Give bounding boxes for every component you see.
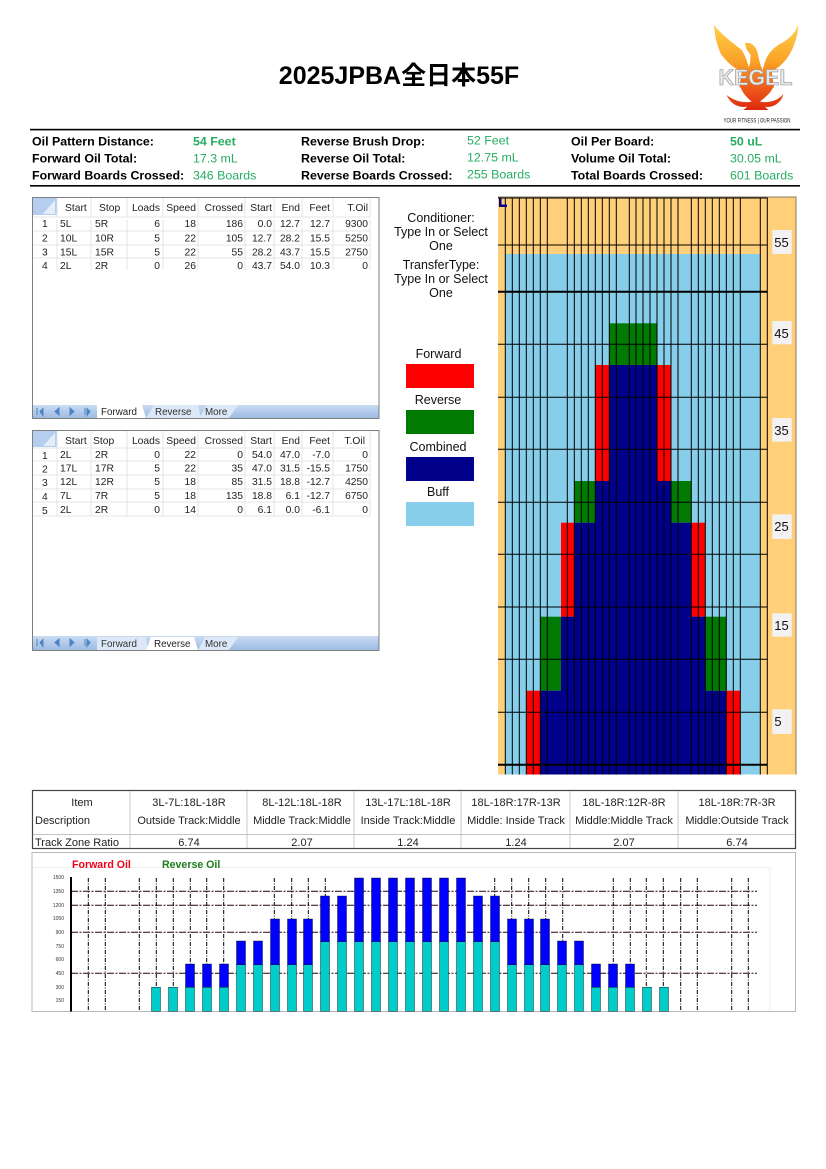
reverse oil summary: Reverse Boards Crossed: [301,168,453,182]
column: middle track left: 8L-12L:18L-18R [262,797,342,809]
table column headers: Crossed [205,203,243,214]
table rows: 7R [95,491,108,502]
reverse oil summary: 255 Boards [467,168,530,182]
table rows: 9300 [345,219,368,230]
reverse oil summary: 52 Feet [467,134,510,148]
column: outside track left: 3L-7L:18L-18R [152,797,226,809]
table rows: 0 [154,450,160,461]
table rows: 0 [237,450,243,461]
y axis labels: 300 [56,985,64,991]
column: inside track right: 18L-18R:17R-13R [471,797,561,809]
legend: pattern colours: Combined [410,440,467,454]
table rows: 6.1 [258,505,272,516]
table column headers: Stop [93,436,114,447]
oil pattern graph [498,197,796,774]
total oil summary: Oil Per Board: [571,134,654,148]
summary header block [30,129,800,187]
table rows: 31.5 [280,464,300,474]
panel: forward load table [32,198,379,418]
column: inside track left: Inside Track:Middle [361,815,455,827]
table rows: 6750 [345,491,368,502]
table rows: 43.7 [252,261,272,272]
table rows: 0 [362,505,368,516]
table rows: 15R [95,248,114,258]
table rows: 12L [60,477,77,488]
title: 2025JPBA全日本55F [279,62,519,90]
table rows: 17R [95,464,114,474]
total oil summary: Total Boards Crossed: [571,168,703,182]
panel: reverse load table [32,430,379,650]
oil volume bar chart [32,852,796,1012]
distance labels: 45 [774,326,789,341]
forward oil bars [152,942,668,1011]
column: inside track left: 13L-17L:18L-18R [365,797,451,809]
table rows: 18.8 [280,477,300,488]
table rows: 1 [42,451,48,462]
table rows: 105 [226,234,243,244]
table rows: 1750 [345,464,368,474]
total oil summary: Volume Oil Total: [571,152,671,166]
logo: Kegel phoenix [714,24,798,125]
table rows: 12R [95,477,114,488]
table rows: 2L [60,450,72,461]
legend: pattern colours: Reverse [415,393,461,407]
table column headers: End [282,436,300,447]
forward oil summary: Forward Oil Total: [32,152,137,166]
row headings [35,797,119,849]
sheet tabs: More [205,639,228,650]
table rows [42,219,368,272]
y axis labels: 600 [56,957,64,963]
column: middle track left: Middle Track:Middle [253,815,351,827]
table rows: 5 [154,234,160,244]
column: middle track right: 18L-18R:12R-8R [582,797,666,809]
table column headers: Loads [132,436,160,447]
oil zones: reverse [540,323,726,691]
total oil summary [571,134,793,182]
table rows: 22 [185,450,196,461]
table column headers: Feet [309,436,330,447]
y axis [70,877,72,1012]
oil zones: combined [540,365,726,774]
column: outside track right: 6.74 [726,837,748,849]
y axis labels: 900 [56,930,64,936]
forward oil summary [32,134,256,182]
column: outside track left: 6.74 [178,837,200,849]
forward oil summary: 346 Boards [193,168,256,182]
distance labels: 55 [774,235,789,250]
table rows: 43.7 [280,248,300,258]
forward oil summary: Forward Boards Crossed: [32,168,184,182]
table rows: 4 [42,261,48,272]
table rows: 22 [185,464,196,474]
column: inside track right [467,797,565,849]
table rows: 5R [95,219,108,230]
table rows: 3 [42,248,48,258]
table rows: 17L [60,464,77,474]
legend: pattern colours: Buff [427,485,450,499]
table rows: -7.0 [312,450,330,461]
table rows: -12.7 [307,477,330,488]
chart legend [72,859,220,871]
column: inside track left: 1.24 [397,837,419,849]
legend: conditioner and transfer type notes [394,211,488,300]
table column headers: Speed [166,203,196,214]
legend: pattern colours [406,347,474,526]
table rows: 0 [237,261,243,272]
table rows: -6.1 [312,505,330,516]
table column headers: Start [65,203,87,214]
table rows [42,450,368,517]
legend: conditioner and transfer type notes: Conditioner: [407,211,475,225]
column: middle track right: 2.07 [613,837,635,849]
reverse oil bars [186,878,634,988]
distance labels: 35 [774,423,789,438]
distance labels: 15 [774,618,789,633]
y axis labels: 1500 [53,875,64,881]
y axis labels [53,875,64,1004]
legend: conditioner and transfer type notes: One [429,286,453,300]
logo: Kegel phoenix: KEGEL [718,65,792,90]
column: inside track right: 1.24 [505,837,527,849]
column: middle track right [575,797,673,849]
table rows: 2 [42,234,48,244]
reverse oil summary: 12.75 mL [467,150,519,164]
sheet tabs: Reverse [154,639,191,650]
column: outside track left: Outside Track:Middle [137,815,241,827]
board grid lines [498,197,767,774]
table rows: 12.7 [280,219,300,230]
table rows: 15L [60,248,77,258]
table rows: 5250 [345,234,368,244]
table rows: 18 [185,477,196,488]
oil zones: forward [526,365,740,774]
sheet tabs: Reverse [155,407,192,418]
y axis labels: 1350 [53,889,64,895]
row headings: Description [35,815,90,827]
table rows: 0 [362,261,368,272]
table rows: 4 [42,492,48,503]
table column headers: Feet [309,203,330,214]
table rows: 0 [154,261,160,272]
table rows: 10R [95,234,114,244]
legend: conditioner and transfer type notes: TransferType: [403,258,479,272]
y axis labels: 750 [56,944,64,950]
table rows: 55 [232,248,243,258]
table column headers: Start [65,436,87,447]
table rows: 54.0 [280,261,300,272]
table column headers: T.Oil [347,203,368,214]
table rows: 22 [185,234,196,244]
table rows: 2R [95,261,108,272]
table rows: 22 [185,248,196,258]
table rows: 135 [226,491,243,502]
distance labels [772,230,792,734]
table rows: 186 [226,219,243,230]
table column headers: Start [250,436,272,447]
table rows: 2R [95,450,108,461]
table rows: 28.2 [252,248,272,258]
table column headers: Stop [99,203,120,214]
table rows: 2L [60,505,72,516]
table rows: 4250 [345,477,368,488]
column: outside track left [137,797,241,849]
total oil summary: 601 Boards [730,168,793,182]
y axis labels: 450 [56,971,64,977]
table rows: 5 [154,477,160,488]
table rows: 0.0 [258,219,272,230]
table rows: 47.0 [252,464,272,474]
table rows: 0 [154,505,160,516]
reverse oil summary [301,134,530,182]
table column headers: Start [250,203,272,214]
column: outside track right: Middle:Outside Track [685,815,789,827]
reverse oil summary: Reverse Oil Total: [301,152,405,166]
table rows: 0 [362,450,368,461]
table rows: 0 [237,505,243,516]
table rows: 3 [42,478,48,489]
table rows: 15.5 [310,234,330,244]
table rows: 28.2 [280,234,300,244]
distance labels: 25 [774,519,789,534]
table rows: 15.5 [310,248,330,258]
sheet tabs [33,405,378,418]
legend: pattern colours: Forward [416,347,461,361]
table rows: 10.3 [310,261,330,272]
table rows: 0.0 [286,505,300,516]
table rows: 26 [185,261,196,272]
table rows: 35 [232,464,243,474]
table rows: -12.7 [307,491,330,502]
table column headers: End [282,203,300,214]
sheet tabs: More [205,407,228,418]
column: outside track right: 18L-18R:7R-3R [698,797,776,809]
table column headers: Loads [132,203,160,214]
table rows: 6.1 [286,491,300,502]
column: inside track left [361,797,455,849]
forward oil summary: Oil Pattern Distance: [32,134,154,148]
column: middle track left: 2.07 [291,837,313,849]
table rows: 12.7 [310,219,330,230]
y axis labels: 150 [56,998,64,1004]
legend: conditioner and transfer type notes: Type In or Select [394,225,488,239]
table rows: -15.5 [307,464,330,474]
distance labels: 5 [774,714,782,729]
row headings: Track Zone Ratio [35,837,119,849]
table column headers: Speed [166,436,196,447]
logo: Kegel phoenix: YOUR FITNESS | OUR PASSION [724,118,791,124]
chart legend: Forward Oil [72,859,131,871]
legend: conditioner and transfer type notes: One [429,239,453,253]
sheet tabs: Forward [101,639,137,650]
table rows: 5 [154,248,160,258]
table rows: 14 [185,505,196,516]
table column headers: T.Oil [344,436,365,447]
table rows: 5 [154,491,160,502]
table rows: 2750 [345,248,368,258]
table column headers [65,203,368,214]
table rows: 1 [42,219,48,230]
track zone ratio table [32,790,796,849]
column: inside track right: Middle: Inside Track [467,815,565,827]
table rows: 47.0 [280,450,300,461]
table rows: 18 [185,219,196,230]
table rows: 12.7 [252,234,272,244]
table rows: 18 [185,491,196,502]
table rows: 7L [60,491,72,502]
table rows: 6 [154,219,160,230]
table rows: 18.8 [252,491,272,502]
icon: top-left cell marker [499,198,507,207]
table column headers [65,436,365,447]
column: middle track right: Middle:Middle Track [575,815,673,827]
table rows: 2R [95,505,108,516]
table rows: 2 [42,464,48,476]
sheet tabs [33,636,378,650]
table rows: 10L [60,234,77,244]
sheet tabs: Forward [101,407,137,418]
legend: conditioner and transfer type notes: Type In or Select [394,272,488,286]
table rows: 54.0 [252,450,272,461]
reverse oil summary: Reverse Brush Drop: [301,134,425,148]
total oil summary: 30.05 mL [730,152,782,166]
table column headers: Crossed [205,436,243,447]
column: outside track right [685,797,789,849]
table rows: 5L [60,219,72,230]
forward oil summary: 54 Feet [193,134,236,148]
table rows: 85 [232,477,243,488]
row headings: Item [71,797,93,809]
column: middle track left [253,797,351,849]
table rows: 5 [42,506,48,517]
table rows: 31.5 [252,477,272,488]
table rows: 2L [60,261,72,272]
forward oil summary: 17.3 mL [193,152,238,166]
table rows: 5 [154,464,160,474]
y axis labels: 1200 [53,903,64,909]
chart legend: Reverse Oil [162,859,220,871]
y axis labels: 1050 [53,916,64,922]
total oil summary: 50 uL [730,134,763,148]
